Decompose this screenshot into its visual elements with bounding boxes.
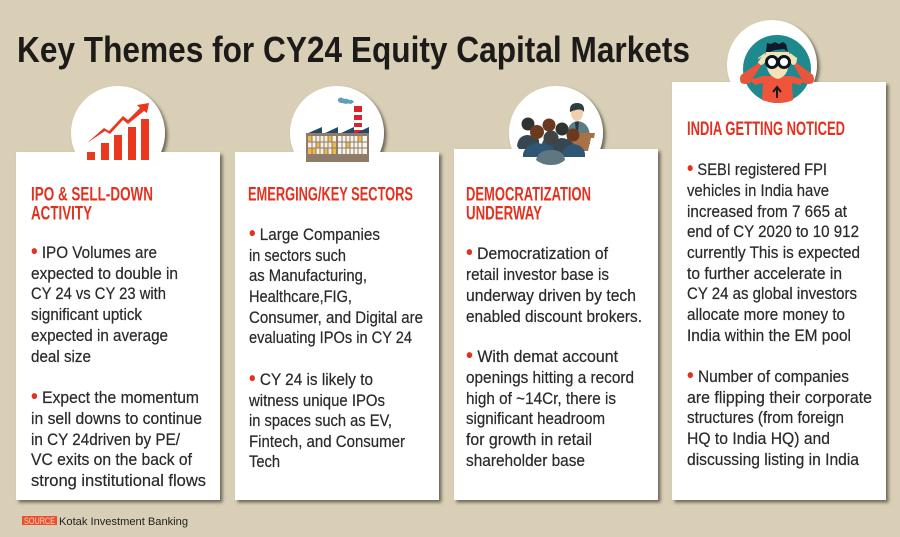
text: IPO volumes: expected to double in (31, 264, 178, 283)
text: unique IPOs: witness unique IPOs (248, 391, 385, 410)
text: FPI vehicles: vehicles in India have (687, 181, 829, 200)
text: unique IPOs: Fintech, and Consumer (249, 432, 405, 451)
text: unique IPOs: Tech (249, 452, 280, 471)
text: company flips: discussing listing in India (687, 450, 859, 469)
text: large companies: • Large Companies (249, 222, 380, 245)
text: demat accounts: for growth in retail (466, 430, 592, 449)
text: company flips: • Number of companies (687, 364, 849, 387)
source line: Kotak Investment Banking (59, 516, 188, 528)
heading: democratization: UNDERWAY (466, 204, 542, 224)
text: demat accounts: openings hitting a record (466, 368, 634, 387)
heading: IPO and sell-down: ACTIVITY (31, 204, 92, 224)
text: large companies: Consumer, and Digital are (249, 308, 423, 327)
text: retail investor base: retail investor base is (466, 265, 609, 284)
text: retail investor base: underway driven by tech (466, 286, 636, 305)
text: unique IPOs: in spaces such as EV, (249, 411, 392, 430)
heading: emerging sectors: EMERGING/KEY SECTORS (248, 184, 413, 206)
text: company flips: HQ to India HQ) and (687, 429, 830, 448)
text: demat accounts (466, 344, 634, 470)
panel: India getting noticed (672, 82, 886, 500)
text: sell-down momentum (31, 385, 206, 490)
text: company flips (687, 364, 872, 469)
text: IPO volumes: • IPO Volumes are (31, 240, 157, 263)
text: sell-down momentum: • Expect the momentum (31, 385, 199, 408)
text: sell-down momentum: VC exits on the back of (31, 450, 192, 469)
text: IPO volumes (31, 240, 178, 366)
text: FPI vehicles: to further accelerate in (687, 264, 842, 283)
icon: person with binoculars (740, 35, 814, 103)
text: FPI vehicles: currently This is expected (687, 243, 860, 262)
text: large companies: evaluating IPOs in CY 24 (249, 328, 412, 347)
text: IPO volumes: CY 24 vs CY 23 with (31, 284, 166, 303)
panel: IPO and sell-down activity (16, 152, 220, 500)
text: FPI vehicles: increased from 7 665 at (687, 202, 847, 221)
text: demat accounts: high of ~14Cr, there is (466, 389, 616, 408)
text: FPI vehicles: • SEBI registered FPI (687, 157, 827, 180)
text: FPI vehicles: allocate more money to (687, 305, 845, 324)
source line: SOURCE (24, 516, 55, 526)
text: sell-down momentum: in CY 24driven by PE/ (31, 430, 180, 449)
text: FPI vehicles: end of CY 2020 to 10 912 (687, 222, 859, 241)
text: retail investor base (466, 241, 642, 326)
panel: emerging and key sectors (235, 152, 439, 500)
text: unique IPOs (248, 367, 405, 471)
text: demat accounts: significant headroom (466, 409, 605, 428)
text: unique IPOs: • CY 24 is likely to (249, 367, 373, 390)
text: FPI vehicles (687, 157, 860, 345)
heading: democratization: DEMOCRATIZATION (466, 184, 591, 206)
heading: democratization (466, 184, 591, 224)
icon: rising bar chart (87, 103, 149, 160)
heading: IPO and sell-down (31, 184, 153, 224)
icon: audience and speaker (517, 103, 595, 165)
text: large companies: in sectors such (249, 246, 346, 265)
heading: IPO and sell-down: IPO & SELL-DOWN (31, 184, 153, 206)
title: Key Themes for CY24 Equity Capital Markets (17, 29, 690, 70)
panel: democratization underway (454, 149, 658, 500)
text: sell-down momentum: strong institutional flows (31, 471, 206, 490)
text: FPI vehicles: CY 24 as global investors (687, 284, 857, 303)
text: large companies: as Manufacturing, (249, 266, 367, 285)
text: sell-down momentum: in sell downs to continue (31, 409, 202, 428)
text: IPO volumes: significant uptick (31, 305, 142, 324)
text: demat accounts: shareholder base (466, 451, 585, 470)
icon: factory (306, 98, 369, 162)
text: company flips: structures (from foreign (687, 408, 844, 427)
text: large companies: Healthcare,FIG, (249, 287, 352, 306)
text: retail investor base: • Democratization of (466, 241, 608, 264)
text: company flips: are flipping their corporate (687, 388, 872, 407)
text: demat accounts: • With demat account (466, 344, 618, 367)
text: IPO volumes: deal size (31, 347, 91, 366)
text: IPO volumes: expected in average (31, 326, 168, 345)
text: large companies (249, 222, 423, 347)
text: retail investor base: enabled discount brokers. (466, 307, 642, 326)
text: FPI vehicles: India within the EM pool (687, 326, 851, 345)
